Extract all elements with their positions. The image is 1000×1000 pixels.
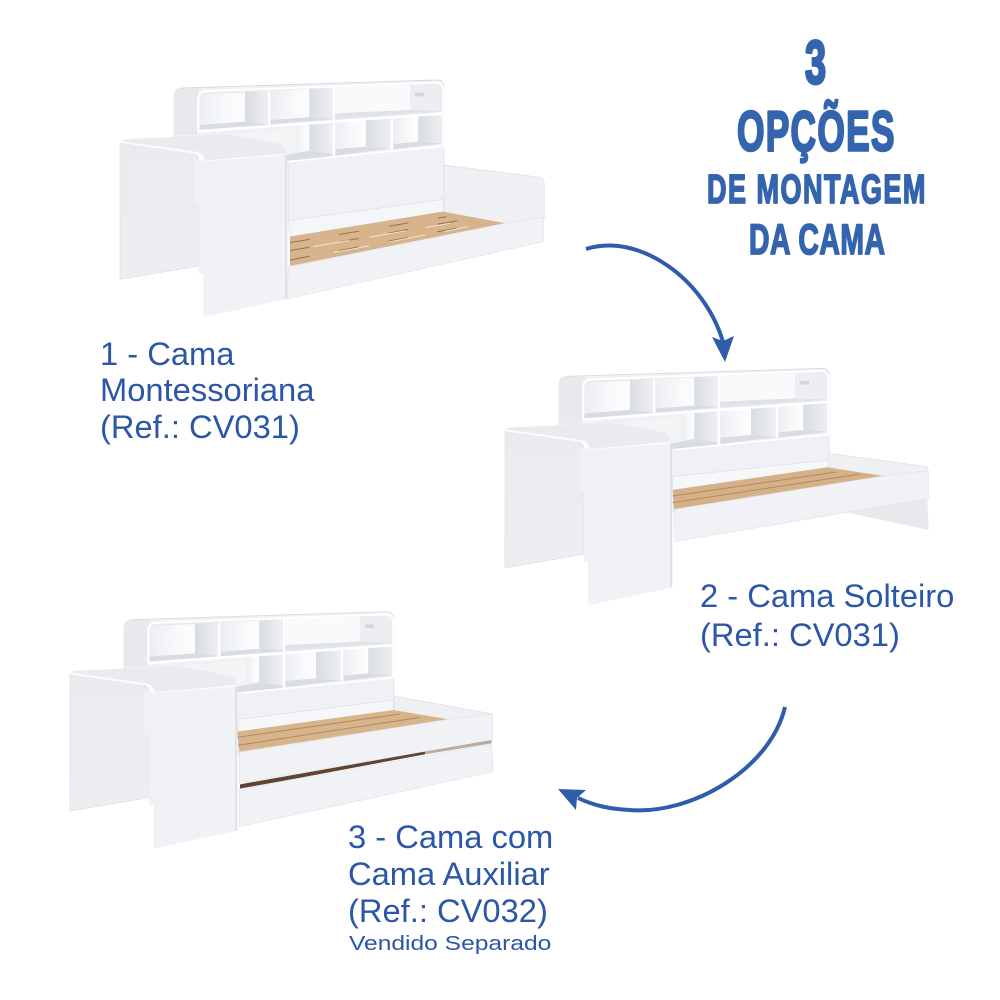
arrow: option 2 to option 3 — [558, 707, 785, 810]
bed 1 front rail — [287, 217, 543, 299]
bed 2 parts — [673, 450, 929, 542]
label: option 2: 2 - Cama Solteiro — [700, 577, 954, 614]
bed 1 side guard panel — [444, 165, 544, 223]
arrow: option 1 to option 2 — [586, 246, 734, 362]
label: option 2: (Ref.: CV031) — [700, 616, 900, 653]
label: option 1: (Ref.: CV031) — [100, 408, 300, 445]
label: option 1 — [100, 335, 315, 445]
label: option 1: 1 - Cama — [100, 335, 235, 372]
label: option 3: (Ref.: CV032) — [348, 892, 548, 929]
label: option 2 — [700, 577, 954, 653]
note: sold separately: Vendido Separado — [349, 932, 551, 955]
label: option 3: Cama Auxiliar — [348, 855, 550, 892]
label: option 1: Montessoriana — [100, 371, 315, 408]
title — [707, 28, 925, 263]
title number 3: 3 — [805, 28, 826, 97]
label: option 3: 3 - Cama com — [348, 818, 553, 855]
panel: bed option 1 montessoriana — [120, 80, 544, 317]
label: option 3 — [348, 818, 553, 955]
bed 3 parts — [237, 693, 493, 827]
panel: bed option 3 cama auxiliar — [70, 612, 493, 849]
bed 1 back rail — [288, 199, 443, 237]
bed 1 wooden slats — [290, 212, 506, 266]
title line de montagem: DE MONTAGEM — [707, 168, 925, 212]
title line opções: OPÇÕES — [737, 98, 894, 164]
panel: bed option 2 solteiro — [505, 368, 929, 605]
title line da cama: DA CAMA — [749, 215, 885, 263]
